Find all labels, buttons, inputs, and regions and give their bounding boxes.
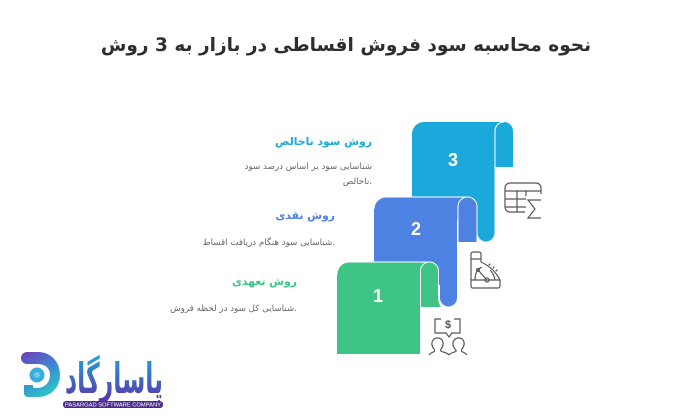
- icon: table with sigma: [505, 183, 541, 218]
- step 2 scroll: [374, 197, 477, 306]
- icon: cash register: [471, 252, 500, 288]
- step 3 scroll: [412, 122, 513, 242]
- step 1 scroll: [337, 262, 442, 354]
- logo: Pasargad: PASARGAD SOFTWARE COMPANY: [65, 402, 161, 408]
- dollar sign: $: [445, 319, 451, 331]
- text: accrual description: شناسایی کل سود در لحظه فروش.: [170, 304, 297, 314]
- step 1 scroll: 1: [373, 286, 383, 306]
- title: نحوه محاسبه سود فروش اقساطی در بازار به 3 روش: [101, 35, 591, 56]
- text: gross profit description: ناخالص.: [343, 176, 372, 186]
- logo: Pasargad: پاسارگاد: [65, 354, 163, 404]
- step 2 scroll: 2: [411, 219, 421, 239]
- icon: two people with dollar speech bubble: [429, 319, 467, 355]
- text: cash description: شناسایی سود هنگام دریافت اقساط.: [203, 238, 335, 248]
- text: gross profit description: [245, 162, 372, 186]
- text: gross profit description: شناسایی سود بر اساس درصد سود: [245, 162, 372, 172]
- step 3 scroll: 3: [448, 150, 458, 170]
- heading: accrual method: روش تعهدی: [232, 275, 297, 288]
- heading: gross profit method: روش سود ناخالص: [275, 135, 372, 148]
- heading: cash method: روش نقدی: [275, 209, 335, 222]
